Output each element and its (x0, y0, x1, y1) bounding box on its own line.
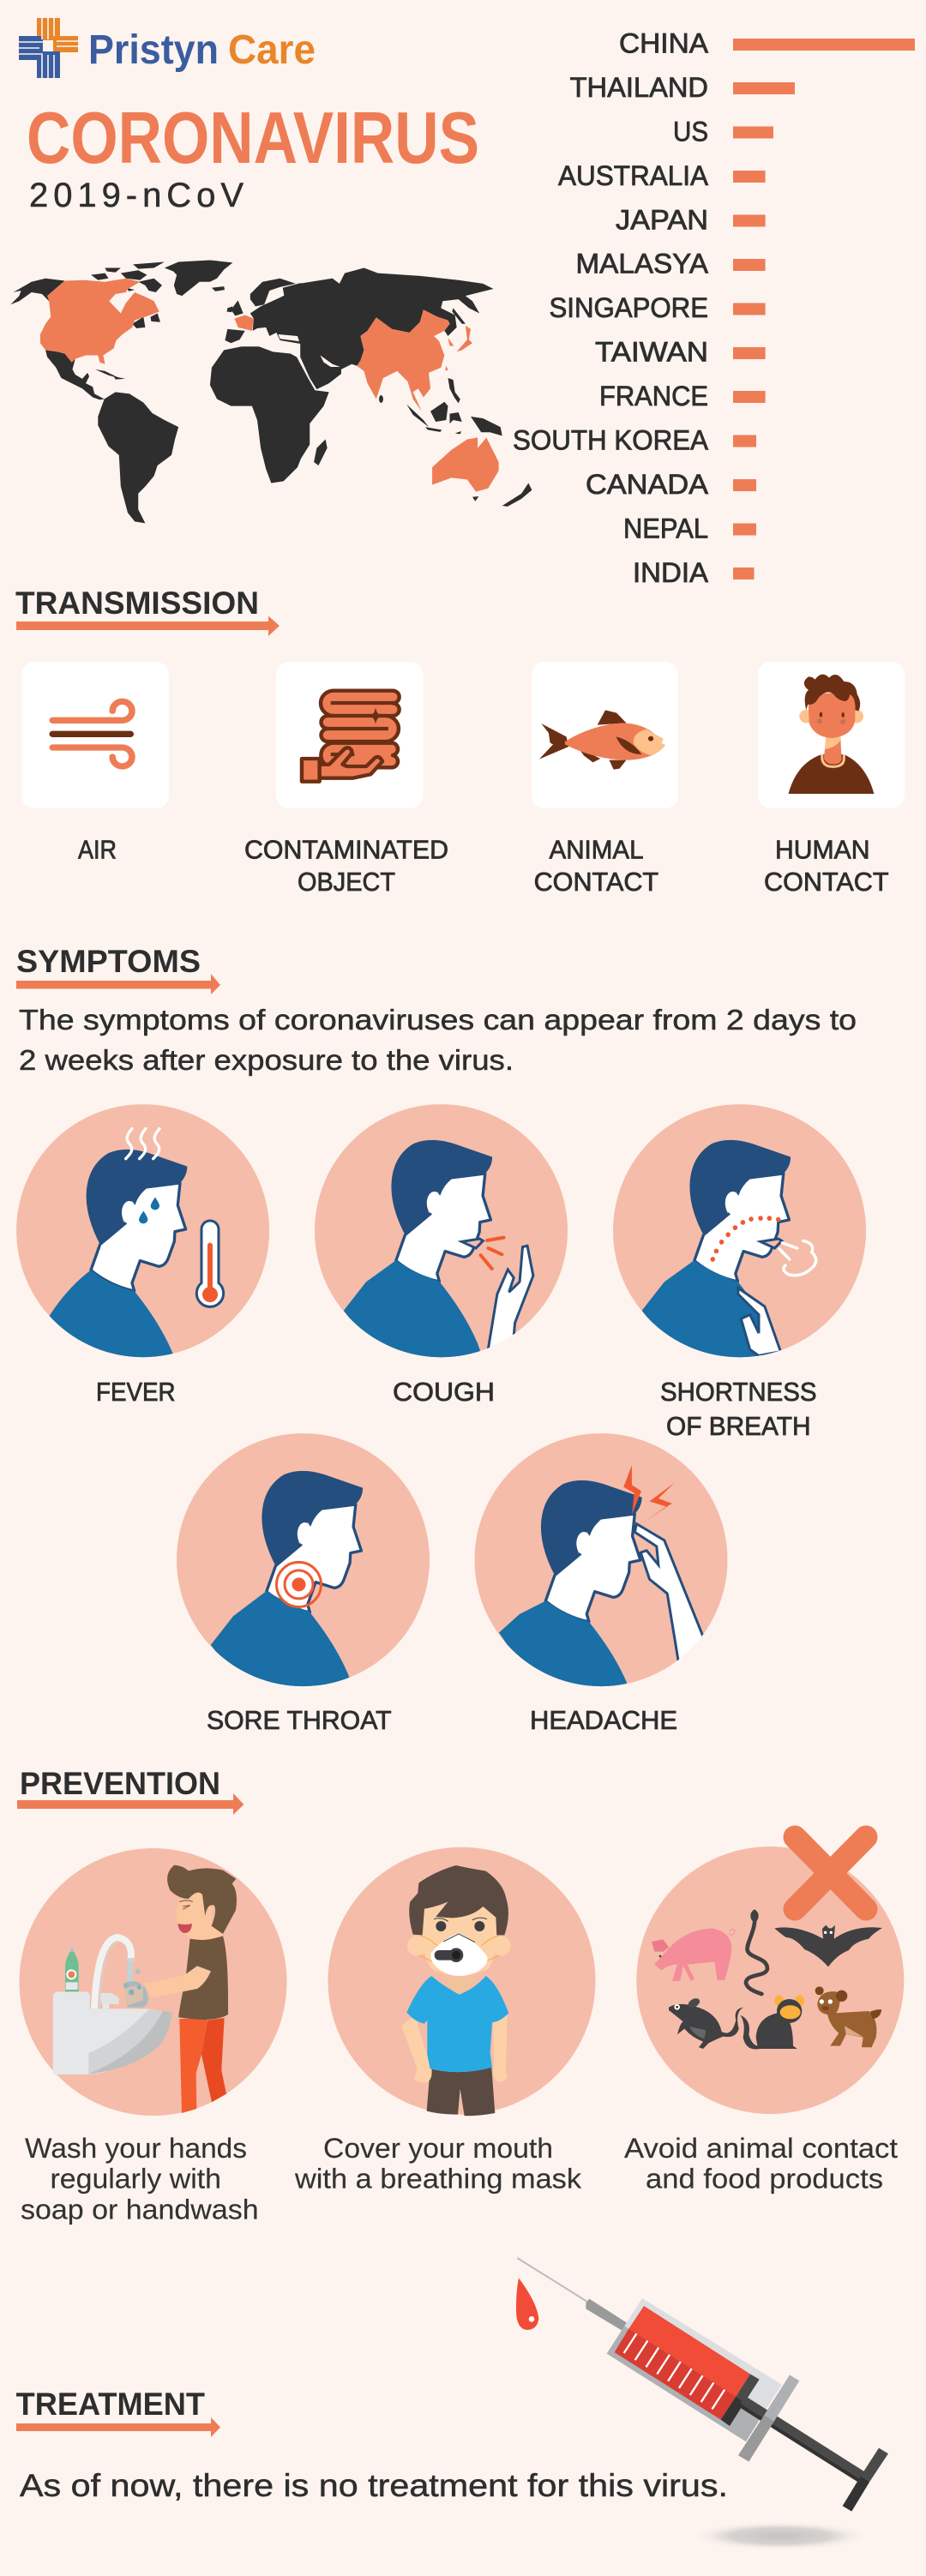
prevention: wash hands (19, 1848, 286, 2116)
prevention: breathing mask (328, 1847, 595, 2116)
icon: fish (539, 710, 665, 770)
bar row: Taiwan (595, 337, 766, 368)
illustration: boy wearing mask (401, 1865, 511, 2116)
icon: breath dots and puff (711, 1216, 816, 1276)
label: human contact: CONTACT (764, 867, 889, 897)
icon: throat target (276, 1562, 321, 1606)
brand name accent: Care (228, 27, 316, 73)
bar row: Canada (586, 469, 756, 500)
bar row: Thailand: THAILAND (570, 72, 708, 103)
heading: transmission (15, 585, 280, 636)
caption: avoid animals: and food products (646, 2163, 883, 2194)
symptom: fever (16, 1104, 269, 1407)
heading: prevention (17, 1766, 244, 1815)
symptoms intro text (19, 1004, 857, 1076)
label: air: AIR (78, 835, 117, 865)
label: shortness of breath (660, 1377, 816, 1441)
icon: pain bolts (623, 1465, 674, 1523)
bar row: India: INDIA (633, 557, 709, 588)
bar row: Singapore: SINGAPORE (549, 292, 708, 323)
monkey (740, 1995, 804, 2050)
bar row: US (673, 116, 773, 147)
label: human contact: HUMAN (775, 835, 869, 865)
title: CORONAVIRUS (27, 98, 479, 179)
card: air (21, 662, 169, 865)
rat (669, 1997, 743, 2049)
label: human contact (764, 835, 889, 897)
bar row: France (599, 381, 766, 411)
label: contaminated object: CONTAMINATED (244, 835, 448, 865)
heading: symptoms (16, 944, 220, 994)
caption: wash hands (21, 2133, 259, 2225)
heading: symptoms: SYMPTOMS (16, 944, 201, 979)
treatment statement: As of now, there is no treatment for this virus. (20, 2468, 728, 2503)
deer (815, 1986, 881, 2047)
caption: wash hands: Wash your hands (25, 2133, 247, 2164)
illustration: animals (652, 1910, 882, 2050)
bar row: Thailand (570, 72, 795, 103)
label: animal contact (534, 835, 658, 897)
card: contaminated object (244, 662, 448, 897)
icon: syringe (516, 2258, 888, 2551)
bar row: Japan: JAPAN (616, 204, 708, 235)
bar row: Canada: CANADA (586, 469, 709, 500)
label: shortness of breath: SHORTNESS (660, 1377, 816, 1407)
caption: avoid animals (624, 2133, 898, 2194)
icon: cross (795, 1837, 866, 1909)
caption: breathing mask: Cover your mouth (323, 2133, 553, 2164)
symptom: cough (315, 1104, 568, 1407)
label: contaminated object: OBJECT (298, 867, 395, 897)
bar row: France: FRANCE (599, 381, 708, 411)
pig (652, 1928, 735, 1981)
caption: breathing mask (294, 2133, 582, 2194)
icon: steam and thermometer (126, 1129, 224, 1306)
label: fever: FEVER (96, 1377, 175, 1407)
caption: wash hands: regularly with (50, 2163, 221, 2194)
bar row: Malasya: MALASYA (576, 249, 709, 279)
brand name: Pristyn (88, 27, 219, 73)
bar row: Malasya (576, 249, 766, 279)
card: human contact (758, 662, 905, 897)
icon: person (789, 675, 874, 794)
label: shortness of breath: OF BREATH (666, 1411, 811, 1441)
caption: breathing mask: with a breathing mask (294, 2163, 582, 2194)
icon: cough marks (481, 1238, 503, 1269)
symptoms intro text: 2 weeks after exposure to the virus. (19, 1044, 514, 1076)
arrow: transmission (16, 615, 280, 636)
arrow: prevention (17, 1793, 244, 1815)
icon: wind (52, 701, 132, 766)
logo: Pristyn Care (19, 18, 316, 78)
caption: wash hands: soap or handwash (21, 2195, 259, 2225)
snake (746, 1910, 767, 1994)
bar row: India (633, 557, 755, 588)
bar row: Nepal (623, 513, 756, 543)
symptom: shortness of breath (613, 1104, 866, 1441)
panel: symptoms (16, 1104, 866, 1735)
icon: logo cross (19, 18, 78, 78)
bar row: US: US (673, 116, 708, 147)
heading: prevention: PREVENTION (20, 1766, 220, 1801)
symptom: sore throat (177, 1433, 430, 1735)
panel: prevention (19, 1837, 904, 2225)
bar row: Taiwan: TAIWAN (595, 337, 708, 368)
bar row: China: CHINA (619, 27, 709, 58)
bar row: China (619, 27, 915, 58)
bar chart: affected countries (513, 27, 915, 588)
label: sore throat: SORE THROAT (207, 1705, 392, 1735)
label: animal contact: CONTACT (534, 867, 658, 897)
label: contaminated object (244, 835, 448, 897)
bat (774, 1925, 882, 1967)
heading: treatment (16, 2387, 220, 2437)
subtitle: 2019-nCoV (29, 177, 244, 214)
heading: transmission: TRANSMISSION (15, 585, 259, 621)
prevention: avoid animals (636, 1837, 904, 2114)
panel: transmission routes (21, 662, 905, 897)
illustration: man at sink (53, 1865, 237, 2113)
bar row: Japan (616, 204, 766, 235)
world map (10, 260, 532, 523)
label: headache: HEADACHE (530, 1705, 677, 1735)
symptoms intro text: The symptoms of coronaviruses can appear from 2 days to (19, 1004, 857, 1036)
arrow: symptoms (16, 974, 220, 994)
symptom: headache (475, 1433, 727, 1735)
arrow: treatment (16, 2417, 220, 2437)
icon: towels in hand (302, 691, 400, 782)
bar row: South Korea: SOUTH KOREA (513, 424, 709, 455)
bar row: Australia: AUSTRALIA (558, 160, 709, 191)
heading: treatment: TREATMENT (16, 2387, 205, 2422)
caption: avoid animals: Avoid animal contact (624, 2133, 898, 2164)
label: cough: COUGH (393, 1377, 495, 1407)
bar row: Nepal: NEPAL (623, 513, 708, 543)
label: animal contact: ANIMAL (549, 835, 643, 865)
card: animal contact (532, 662, 678, 897)
